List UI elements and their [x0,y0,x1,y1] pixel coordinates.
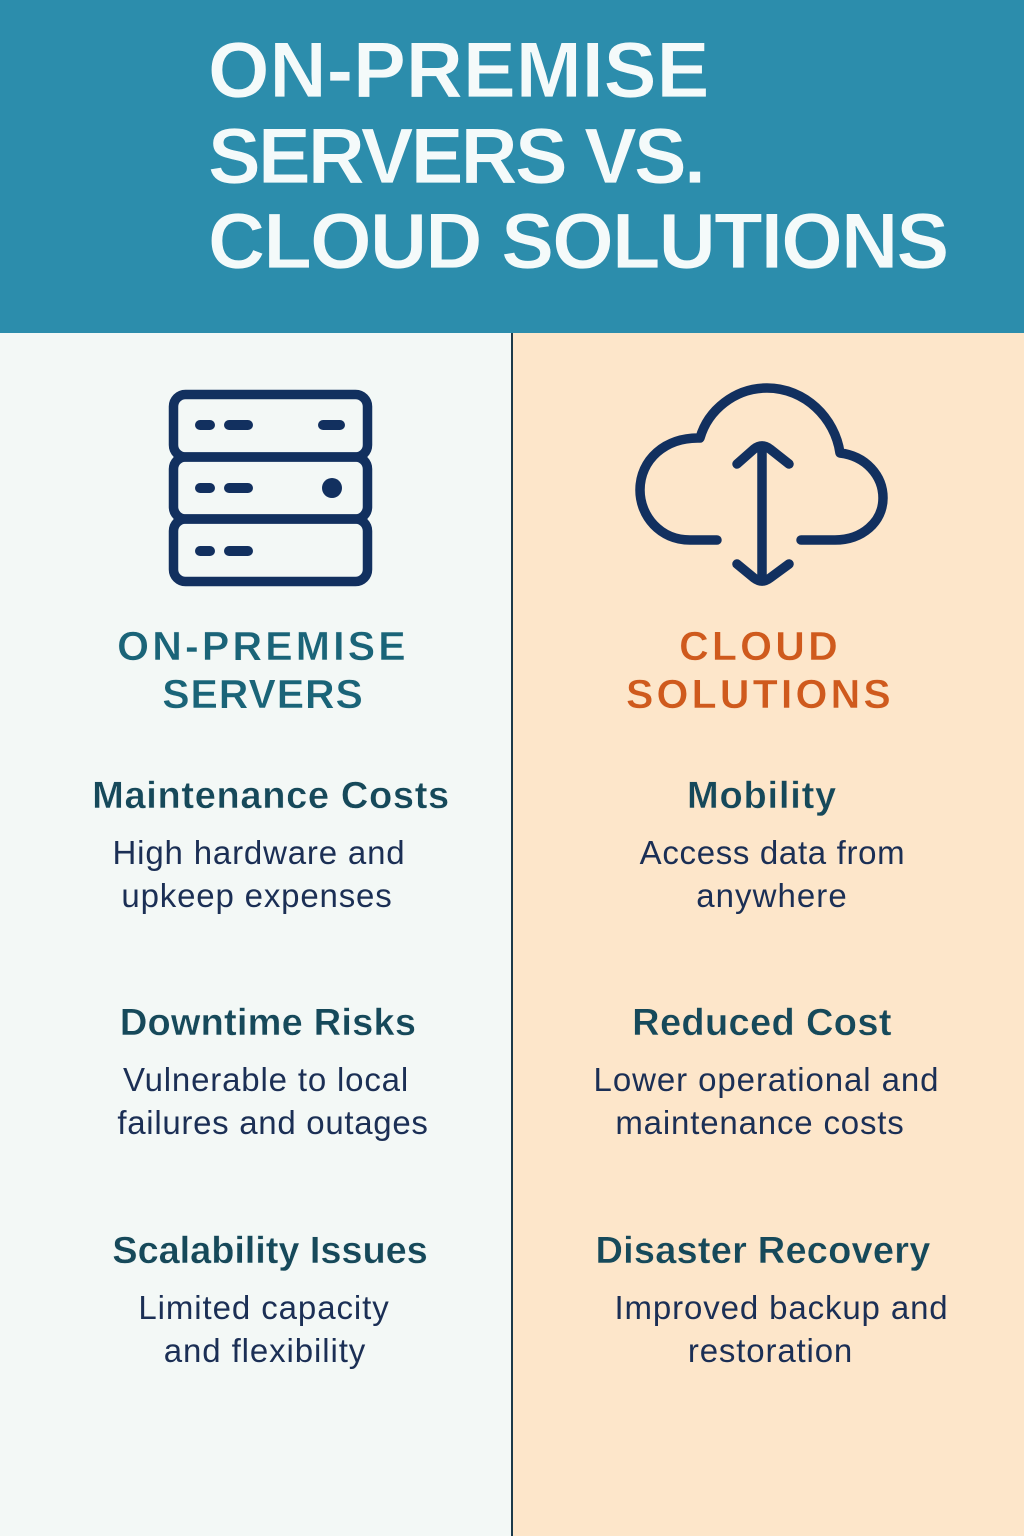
heading: on-premise servers: ON-PREMISE [117,623,409,669]
item text: disaster recovery [614,1289,949,1368]
item text: reduced cost [594,1061,939,1140]
item text: downtime risks [117,1061,429,1141]
item heading: mobility: Mobility [687,775,837,817]
item heading: scalability issues: Scalability Issues [112,1230,428,1272]
heading: on-premise servers: SERVERS [162,671,364,717]
item text: reduced cost: maintenance costs [615,1104,905,1140]
heading: cloud solutions [626,623,894,717]
item heading: maintenance costs: Maintenance Costs [92,775,450,817]
item text: mobility: Access data from [640,834,905,871]
header banner [0,0,1024,333]
item text: downtime risks: Vulnerable to local [123,1061,409,1098]
item text: downtime risks: failures and outages [117,1104,429,1140]
item text: maintenance costs [113,834,405,914]
title [208,25,948,285]
item text: mobility [640,834,905,914]
title: CLOUD SOLUTIONS [208,196,948,285]
item text: disaster recovery: restoration [688,1332,853,1368]
title: ON-PREMISE [208,25,709,114]
panel: on-premise servers [0,333,511,1536]
panel: cloud solutions [513,333,1024,1536]
title: SERVERS VS. [208,111,703,200]
item text: scalability issues: Limited capacity [138,1289,390,1326]
item text: disaster recovery: Improved backup and [614,1289,949,1326]
icon: cloud with up/down arrow [635,383,888,586]
item text: maintenance costs: High hardware and [113,834,405,871]
item heading: downtime risks: Downtime Risks [120,1002,416,1044]
item text: maintenance costs: upkeep expenses [121,876,393,914]
item heading: disaster recovery: Disaster Recovery [595,1230,931,1272]
heading: cloud solutions: CLOUD [679,623,841,669]
heading: cloud solutions: SOLUTIONS [626,671,894,717]
item heading: reduced cost: Reduced Cost [632,1002,892,1044]
item text: mobility: anywhere [696,876,848,914]
heading: on-premise servers [117,623,409,717]
icon: server rack [168,390,372,586]
item text: scalability issues [138,1289,390,1369]
item text: reduced cost: Lower operational and [594,1061,939,1098]
item text: scalability issues: and flexibility [164,1332,366,1368]
